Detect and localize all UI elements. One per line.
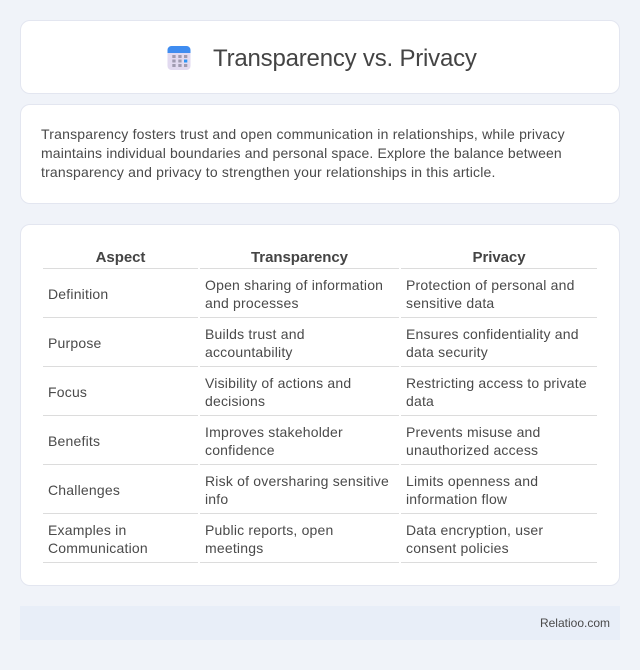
row: Benefits: Benefits (48, 433, 100, 449)
row: Focus (48, 375, 587, 409)
row: Benefits (48, 424, 541, 458)
panel: comparison table (20, 224, 620, 586)
row: Focus: decisions (205, 393, 265, 409)
row: Definition: and processes (205, 295, 299, 311)
row: Challenges: Challenges (48, 482, 120, 498)
row: Challenges: Risk of oversharing sensitive (205, 473, 389, 489)
row: Purpose: accountability (205, 344, 293, 360)
text: introduction: transparency and privacy to strengthen your relationships in this article. (41, 164, 496, 180)
table heading: Privacy: Privacy (472, 249, 526, 266)
row: Examples in Communication: Data encryption, user (406, 522, 543, 538)
row: Definition: Protection of personal and (406, 277, 575, 293)
footer bar (20, 606, 620, 640)
row: Definition: Definition (48, 286, 108, 302)
panel: introduction (20, 104, 620, 204)
row: Benefits: unauthorized access (406, 442, 538, 458)
icon: calendar (168, 46, 190, 70)
row: Challenges (48, 473, 538, 507)
row: Challenges: Limits openness and (406, 473, 538, 489)
table heading: Transparency: Transparency (251, 249, 348, 266)
row: Purpose: Ensures confidentiality and (406, 326, 579, 342)
row: Focus: Focus (48, 384, 87, 400)
row: Definition: sensitive data (406, 295, 494, 311)
row: Examples in Communication: Communication (48, 540, 148, 556)
row: Benefits: Prevents misuse and (406, 424, 541, 440)
row: Benefits: confidence (205, 442, 275, 458)
row: Challenges: info (205, 491, 228, 507)
row: Definition: Open sharing of information (205, 277, 383, 293)
row: Examples in Communication: Public reports, open (205, 522, 334, 538)
row: Focus: Visibility of actions and (205, 375, 351, 391)
row: Definition (48, 277, 575, 311)
footer text: Relatioo.com (540, 616, 610, 630)
text: introduction: Transparency fosters trust and open communication in relationships, while privacy (41, 126, 565, 142)
panel: title card (20, 20, 620, 94)
row: Challenges: information flow (406, 491, 507, 507)
row: Purpose: Purpose (48, 335, 102, 351)
row: Focus: Restricting access to private (406, 375, 587, 391)
row: Purpose: data security (406, 344, 488, 360)
table heading: Aspect: Aspect (96, 249, 145, 266)
row: Examples in Communication: Examples in (48, 522, 126, 538)
title: Transparency vs. Privacy (213, 45, 477, 72)
row: Examples in Communication: consent policies (406, 540, 509, 556)
text: introduction (41, 126, 565, 180)
row: Benefits: Improves stakeholder (205, 424, 343, 440)
text: introduction: maintains individual boundaries and personal space. Explore the balance between (41, 145, 562, 161)
row: Examples in Communication: meetings (205, 540, 263, 556)
row: Focus: data (406, 393, 434, 409)
row: Purpose: Builds trust and (205, 326, 305, 342)
row: Examples in Communication (48, 522, 543, 556)
row: Purpose (48, 326, 579, 360)
